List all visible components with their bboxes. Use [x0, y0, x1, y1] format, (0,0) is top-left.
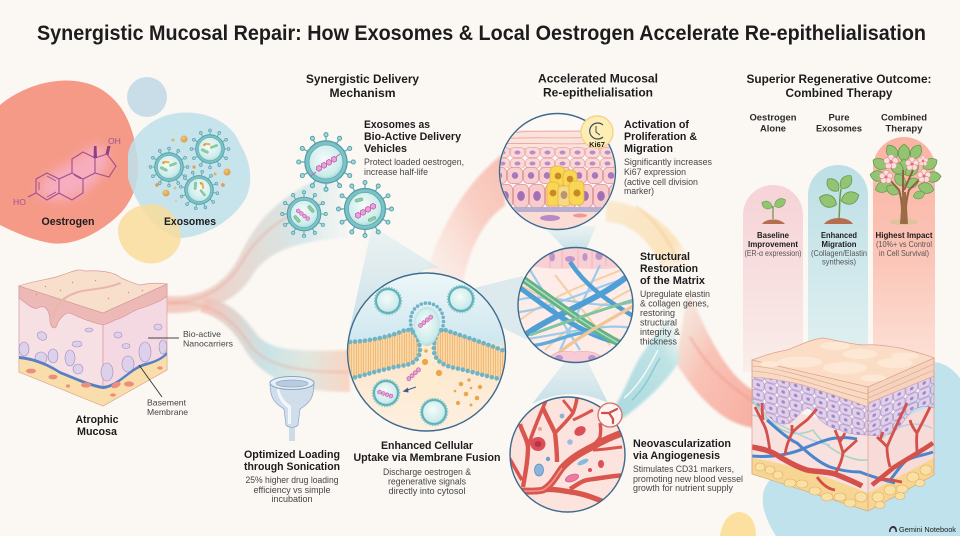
label: atrophic mucosa: Mucosa	[77, 426, 118, 438]
circle: matrix fibres	[516, 248, 640, 365]
callout: basement membrane	[139, 365, 188, 417]
text: oestrogen outcome: Improvement	[748, 239, 798, 249]
text: activation of proliferation: Ki67 expression	[624, 167, 686, 177]
column label: oestrogen alone: Oestrogen	[750, 112, 797, 122]
icon: oestrogen molecule: OH	[108, 136, 121, 146]
block edges	[752, 358, 934, 511]
text: activation of proliferation: (active cell division	[624, 177, 698, 187]
purple epidermal cells right	[868, 376, 934, 436]
icon: oestrogen molecule: HO	[13, 197, 26, 207]
text: neovascularization: Neovascularization	[633, 438, 731, 450]
text: optimized loading: 25% higher drug loading	[246, 475, 339, 485]
text: structural restoration	[640, 251, 710, 346]
text: exosomes outcome: Migration	[822, 239, 856, 249]
free vesicles	[374, 287, 473, 424]
column label: combined therapy: Therapy	[886, 124, 923, 134]
column label: oestrogen alone	[750, 112, 797, 134]
callout: bio-active nanocarriers	[148, 329, 233, 348]
text: neovascularization: via Angiogenesis	[633, 450, 720, 462]
icon: oestrogen molecule	[13, 136, 121, 207]
text: structural restoration: Upregulate elastin	[640, 289, 710, 299]
text: optimized loading: through Sonication	[244, 461, 340, 473]
connector beams between circles	[349, 226, 608, 404]
text: optimized loading: incubation	[272, 494, 313, 504]
heading: synergistic delivery mechanism: Synergistic Delivery	[306, 72, 419, 86]
text: enhanced cellular uptake: Discharge oestrogen &	[383, 467, 471, 477]
label: atrophic mucosa: Atrophic	[76, 414, 118, 426]
oestrogen droplets	[422, 349, 482, 406]
callout: basement membrane: Membrane	[147, 407, 188, 417]
proliferating yellow cells	[547, 166, 584, 206]
heading: superior regenerative outcome	[746, 72, 932, 100]
text: optimized loading	[244, 449, 340, 504]
top surface	[752, 338, 934, 387]
column label: pure exosomes: Pure	[828, 112, 850, 122]
text: neovascularization	[633, 438, 743, 493]
text: structural restoration: thickness	[640, 336, 678, 346]
text: exosomes as delivery vehicles: increase half-life	[364, 167, 428, 177]
text: structural restoration: of the Matrix	[640, 275, 706, 287]
column label: oestrogen alone: Alone	[760, 124, 786, 134]
purple epidermal cells left	[752, 376, 868, 435]
callout: bio-active nanocarriers: Bio-active	[183, 329, 221, 339]
mucosa left face	[19, 286, 103, 406]
text: neovascularization: growth for nutrient supply	[633, 483, 734, 493]
icon: delivery vesicles	[281, 133, 394, 238]
text: activation of proliferation: Migration	[624, 143, 673, 155]
mucosa epithelial band	[19, 284, 167, 328]
column label: pure exosomes	[816, 112, 862, 134]
mucosa cells	[19, 324, 167, 381]
text: enhanced cellular uptake: Uptake via Membrane Fusion	[354, 452, 501, 464]
text: exosomes outcome: Enhanced	[821, 230, 857, 240]
text: exosomes as delivery vehicles	[364, 119, 464, 177]
text: enhanced cellular uptake	[354, 440, 501, 496]
heading: accelerated re-epithelialisation: Accelerated Mucosal	[538, 72, 658, 86]
text: exosomes outcome	[811, 230, 867, 266]
text: combined outcome	[876, 230, 933, 258]
membrane left lobe	[345, 330, 420, 380]
text: activation of proliferation	[624, 119, 713, 196]
watermark: gemini notebook: Gemini Notebook	[899, 525, 956, 534]
text: structural restoration: structural	[640, 318, 677, 328]
callout: basement membrane: Basement	[147, 398, 187, 408]
text: optimized loading: Optimized Loading	[244, 449, 340, 461]
text: exosomes as delivery vehicles: Protect loaded oestrogen,	[364, 157, 464, 167]
uptake arrow	[406, 387, 416, 390]
title: Synergistic Mucosal Repair: How Exosomes & Local Oestrogen Accelerate Re-epithelialisation	[37, 22, 926, 45]
heading: accelerated re-epithelialisation	[538, 72, 658, 100]
icon: exosome cluster	[149, 129, 230, 216]
dermis left	[752, 400, 868, 493]
text: activation of proliferation: Activation of	[624, 119, 689, 131]
text: neovascularization: Stimulates CD31 markers,	[633, 464, 734, 474]
text: enhanced cellular uptake: directly into cytosol	[388, 486, 466, 496]
text: exosomes outcome: (Collagen/Elastin	[811, 248, 867, 258]
basement membrane	[19, 352, 167, 389]
bar: oestrogen alone	[743, 185, 803, 372]
text: structural restoration: restoring	[640, 308, 675, 318]
bar: combined therapy	[873, 137, 935, 372]
text: exosomes as delivery vehicles: Exosomes as	[364, 119, 430, 131]
text: combined outcome: in Cell Survival)	[879, 248, 929, 258]
text: exosomes as delivery vehicles: Vehicles	[364, 143, 407, 155]
heading: synergistic delivery mechanism	[306, 72, 419, 100]
text: exosomes outcome: synthesis)	[822, 256, 856, 266]
mucosa right face	[103, 284, 167, 406]
lower layer	[19, 353, 167, 406]
text: neovascularization: promoting new blood vessel	[633, 474, 743, 484]
icon: flowering tree	[869, 142, 941, 225]
circle: angiogenesis vessels	[505, 397, 628, 512]
text: structural restoration: & collagen genes,	[640, 298, 709, 308]
column label: combined therapy	[881, 112, 927, 134]
icon: sonication funnel	[270, 376, 314, 441]
circle: ki67 epithelium	[491, 114, 621, 232]
text: exosomes as delivery vehicles: Bio-Active Delivery	[364, 131, 462, 143]
heading: accelerated re-epithelialisation: Re-epithelialisation	[543, 86, 653, 100]
text: activation of proliferation: marker)	[624, 186, 654, 196]
stratum left	[752, 360, 868, 407]
heading: synergistic delivery mechanism: Mechanism	[330, 86, 396, 100]
fusing vesicle	[411, 303, 443, 333]
icon: small sprout	[760, 196, 787, 224]
illustration: atrophic mucosa block	[19, 270, 167, 406]
dermis right	[868, 405, 934, 493]
callout: bio-active nanocarriers: Nanocarriers	[183, 338, 233, 348]
text: structural restoration: Structural	[640, 251, 690, 263]
fat layer	[752, 440, 934, 511]
column label: combined therapy: Combined	[881, 112, 927, 122]
column label: pure exosomes: Exosomes	[816, 124, 862, 134]
text: enhanced cellular uptake: regenerative signals	[388, 476, 467, 486]
icon: medium plant	[817, 172, 861, 224]
heading: superior regenerative outcome: Superior Regenerative Outcome:	[746, 72, 932, 86]
badge: vessel icon	[598, 403, 622, 427]
text: optimized loading: efficiency vs simple	[254, 485, 331, 495]
circle: membrane fusion	[340, 270, 515, 431]
label: atrophic mucosa	[76, 414, 118, 438]
label: Exosomes: Exosomes	[164, 216, 216, 228]
text: oestrogen outcome	[744, 230, 802, 258]
badge: ki67 clock	[581, 116, 613, 149]
text: oestrogen outcome: Baseline	[757, 230, 789, 240]
mucosa top surface	[19, 270, 167, 313]
badge: ki67 clock: Ki67	[589, 140, 605, 149]
text: structural restoration: integrity &	[640, 327, 680, 337]
text: combined outcome: (10%+ vs Control	[876, 239, 932, 249]
text: combined outcome: Highest Impact	[876, 230, 933, 240]
blue and green vessels	[752, 400, 933, 483]
text: activation of proliferation: Significantly increases	[624, 157, 713, 167]
text: oestrogen outcome: (ER-α expression)	[744, 248, 802, 258]
illustration: regenerated mucosa block	[752, 338, 934, 511]
label: Oestrogen: Oestrogen	[42, 216, 95, 228]
membrane right lobe	[434, 330, 507, 380]
stratum right	[868, 358, 934, 403]
flowing ribbons	[166, 152, 756, 428]
text: activation of proliferation: Proliferation &	[624, 131, 697, 143]
text: enhanced cellular uptake: Enhanced Cellular	[381, 440, 474, 452]
fat globules	[755, 463, 932, 508]
text: structural restoration: Restoration	[640, 263, 698, 275]
bar: pure exosomes	[808, 165, 868, 372]
red vessels	[752, 403, 933, 490]
heading: superior regenerative outcome: Combined Therapy	[786, 86, 893, 100]
